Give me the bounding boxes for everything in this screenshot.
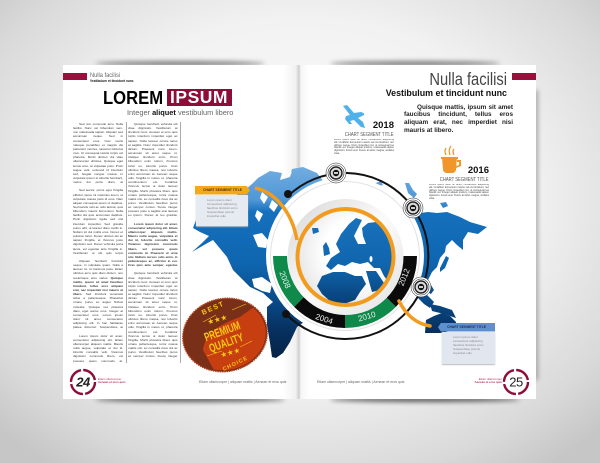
world map bbox=[192, 167, 487, 358]
subtitle: Integer aliquet vestibulum libero bbox=[127, 108, 233, 117]
left running head: Vestibulum et tincidunt nunc bbox=[90, 78, 134, 82]
callout: left: Lorem ipsum dolor bbox=[207, 198, 232, 202]
page 24 caption bbox=[98, 377, 126, 384]
timeline node top bbox=[326, 163, 346, 183]
divider right of columns bbox=[179, 122, 182, 363]
right header bar bbox=[512, 73, 536, 80]
left header bar bbox=[63, 73, 87, 80]
callout: right bbox=[438, 323, 496, 366]
year 2016 block: CHART SEGMENT TITLE bbox=[440, 176, 489, 182]
page 24 caption: Etiam ullamcorper bbox=[98, 377, 121, 381]
globe bbox=[288, 199, 404, 315]
page number 25: 25 bbox=[509, 374, 523, 390]
right running title bbox=[386, 69, 507, 98]
right running title: Nulla facilisi bbox=[429, 69, 507, 89]
footer left: Etiam ullamcorper | aliquam mattis | Aenean et eros quis bbox=[199, 380, 286, 384]
callout: right: consectetur adipiscing bbox=[453, 339, 483, 343]
year 2016 block: 2016 bbox=[468, 165, 489, 176]
right text column bbox=[128, 122, 178, 358]
timeline dot left bottom bbox=[282, 310, 290, 318]
page number 24 bbox=[71, 370, 95, 394]
right running title: Vestibulum et tincidunt nunc bbox=[386, 88, 507, 98]
segment band: 2004 bbox=[314, 312, 334, 326]
callout: left bbox=[195, 186, 250, 228]
segment band: 2010 bbox=[357, 310, 377, 323]
callout: left: CHART SEGMENT TITLE bbox=[203, 188, 242, 192]
footer right: Etiam ullamcorper | aliquam mattis | Aenean et eros quis bbox=[317, 380, 404, 384]
callout: left: consectetur adipiscing bbox=[207, 202, 237, 206]
page number 24: 24 bbox=[75, 374, 91, 390]
main title: LOREM bbox=[103, 87, 163, 108]
segment band: 2012 bbox=[397, 267, 412, 287]
callout: right: CHART SEGMENT TITLE bbox=[447, 325, 486, 329]
callout: right: Lorem ipsum dolor bbox=[453, 334, 478, 338]
quality badge: QUALITY bbox=[207, 332, 246, 356]
segment band bbox=[273, 256, 417, 328]
page 24 caption: Aenean et eros quis bbox=[98, 380, 125, 384]
year 2016 block bbox=[429, 165, 489, 200]
world map and timeline graphic bbox=[70, 105, 530, 396]
quality badge bbox=[182, 298, 268, 372]
page 25 caption bbox=[474, 377, 502, 384]
quality badge: ★★★ bbox=[206, 312, 229, 327]
timeline disc bbox=[266, 177, 424, 335]
quality badge: ★★★ bbox=[219, 345, 242, 360]
magazine pages bbox=[63, 65, 536, 399]
timeline node right bbox=[403, 198, 423, 218]
callout: right: faucibus tincidunt enim bbox=[453, 343, 484, 347]
callout: right: Suspendisse potenti bbox=[453, 347, 480, 351]
timeline node lower right bbox=[411, 277, 431, 297]
quality badge: BEST bbox=[201, 300, 226, 317]
main title bbox=[103, 87, 232, 108]
callout: left: Suspendisse potenti bbox=[207, 210, 234, 214]
quality badge: PREMIUM bbox=[203, 320, 242, 345]
left running head: Nulla facilisi bbox=[90, 72, 120, 79]
quality badge: CHOICE bbox=[222, 355, 249, 373]
segment band: 2008 bbox=[277, 270, 293, 290]
callout: right: imperdiet odio bbox=[453, 351, 472, 355]
icon: coffee cup bbox=[441, 146, 461, 173]
left running head bbox=[90, 72, 134, 82]
year 2018 block bbox=[334, 120, 394, 155]
column divider bbox=[124, 122, 127, 363]
main title: IPSUM bbox=[170, 87, 228, 107]
page number 25 bbox=[504, 370, 528, 394]
year 2018 block: 2018 bbox=[373, 120, 394, 131]
callout: left: faucibus tincidunt enim bbox=[207, 206, 238, 210]
timeline dot left top bbox=[284, 190, 292, 198]
outer black timeline arc bbox=[286, 173, 428, 339]
intro paragraph: Quisque mattis, ipsum sit amet faucibus tincidunt, tellus eros aliquam erat, nec imperdiet nisi mauris at libero. bbox=[404, 104, 513, 134]
map water details bbox=[252, 172, 292, 293]
page 25 caption: Etiam ullamcorper bbox=[479, 377, 502, 381]
page 25 caption: Aenean et eros quis bbox=[475, 380, 502, 384]
orange connector top left bbox=[255, 188, 297, 240]
year 2018 block: CHART SEGMENT TITLE bbox=[345, 132, 394, 138]
icon: airplane bbox=[343, 105, 365, 128]
left text column bbox=[73, 122, 123, 363]
orange connector bottom right bbox=[399, 301, 430, 326]
callout: left: imperdiet odio bbox=[207, 214, 226, 218]
